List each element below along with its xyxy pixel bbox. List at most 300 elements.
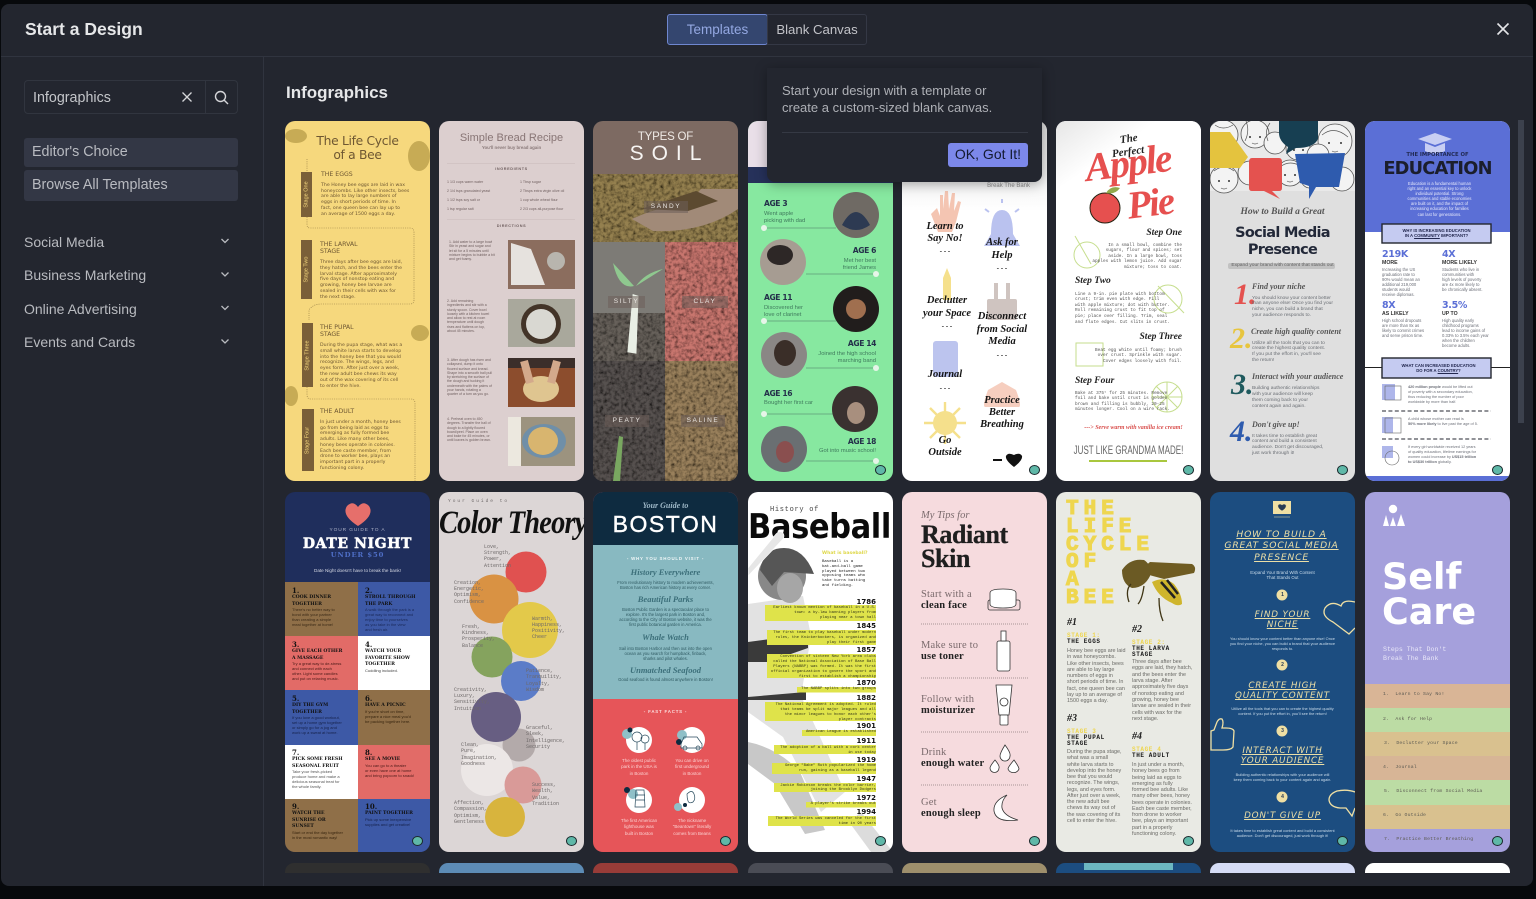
card: guide to boston: The nickname <box>678 818 706 822</box>
card: age timeline: Bought her first car <box>764 400 813 406</box>
date idea 6: be packing together here. <box>365 719 410 724</box>
card: social media presence: Find your niche <box>1252 282 1305 291</box>
card: perfect apple pie: Step Two <box>1075 276 1111 286</box>
card: color theory: Prosperity, <box>462 636 495 642</box>
card: the life cycle of a bee: cells with wax for the <box>1132 710 1182 716</box>
card: the life cycle of a bee: Honey bee eggs are laid <box>1067 648 1125 654</box>
card: simple bread recipe: board/peel. Place on oven <box>447 430 488 434</box>
card: types of soil: TYPES OF <box>638 131 693 143</box>
date idea 7 <box>292 748 343 789</box>
card: history of baseball: George "Babe" Ruth popularized the home <box>785 764 876 768</box>
card: guide to boston: Your Guide to <box>643 501 688 510</box>
card: social media presence: Interact with your audience <box>1252 372 1343 381</box>
card: simple bread recipe: and allow to rest at room <box>447 316 485 320</box>
card: history of baseball: 1901 <box>857 722 876 730</box>
card: social media presence: 2. <box>1230 322 1252 355</box>
card: life cycle of a bee: In just under a month, honey bees <box>320 420 401 425</box>
card: the life cycle of a bee: After just over a week, <box>1067 793 1120 799</box>
card: social media presence: content and build a consistent <box>1252 439 1317 444</box>
card: color theory: Intuition <box>454 706 481 712</box>
card: steps that don't break the bank: Declutter <box>927 295 967 306</box>
card: history of baseball: The NABBP splits into two groups <box>801 686 876 690</box>
card: guide to boston: comes from Beans <box>673 830 711 836</box>
card: life cycle of a bee: the next stage. <box>320 295 356 300</box>
card: the life cycle of a bee: short periods of time. In <box>1067 679 1123 685</box>
card: the life cycle of a bee: recognize. The wings, <box>1067 780 1119 786</box>
card: simple bread recipe: 4. Preheat oven to 450 <box>447 417 482 421</box>
card: simple bread recipe: and get foamy. <box>449 257 472 261</box>
card: history of baseball: 1919 <box>857 756 876 764</box>
card: social media presence: Don't give up! <box>1252 420 1300 429</box>
date idea 4: TOGETHER <box>365 662 395 667</box>
card: perfect apple pie: The <box>1119 132 1138 146</box>
card: color theory: Balance <box>462 643 483 649</box>
card: guide to boston: You can drive on <box>675 758 709 762</box>
card: life cycle of a bee: growing, honey bee larvae are <box>320 283 392 288</box>
card: the life cycle of a bee: develop into the honey <box>1067 768 1121 774</box>
card: importance of education: and serve prison time. <box>1382 333 1423 338</box>
date idea 7: SEASONAL FRUIT <box>292 764 339 769</box>
card: the life cycle of a bee: eggs are laid, they hatch, <box>1132 665 1192 671</box>
date idea 2: STROLL THROUGH <box>365 595 415 600</box>
date idea 4 <box>364 640 410 673</box>
date idea 10: Pick up some inexpensive <box>365 817 411 822</box>
card: life cycle of a bee: STAGE <box>320 331 340 338</box>
date idea 9: WATCH THE <box>292 811 324 816</box>
card: history of baseball: the minor leagues to honor each other's <box>785 713 876 717</box>
tab: blank canvas <box>767 14 867 45</box>
card: simple bread recipe: sturdy spoon. Cover bowl <box>447 308 486 312</box>
card: life cycle of a bee: fact, one queen bee can lay up to <box>321 206 400 211</box>
card: history of baseball: opposing teams who <box>822 574 865 578</box>
button: browse all templates <box>24 170 238 201</box>
card: history of baseball: and fielding. <box>822 584 853 588</box>
card: importance of education: If every girl worldwide received 12 years <box>1408 445 1476 449</box>
card: the life cycle of a bee: THE PUPAL <box>1067 734 1105 741</box>
card: social media presence: How to Build a Great <box>1241 207 1324 217</box>
tooltip: onboarding callout: create a custom-sized blank canvas. <box>782 100 992 115</box>
card: life cycle of a bee: larval stage. After approximately <box>320 272 397 277</box>
card: importance of education: increasing education for families <box>1410 206 1469 211</box>
card: the life cycle of a bee: chews its way out of <box>1067 805 1115 811</box>
card: history of baseball: called the National Association of Base Ball <box>773 660 876 664</box>
card: simple bread recipe: temperature until dough <box>447 320 484 324</box>
card: guide to boston: BOSTON <box>613 510 718 536</box>
card: importance of education: High school dropouts <box>1382 318 1421 323</box>
card: life cycle of a bee: drone to worker bee, plays an <box>320 454 390 459</box>
card: importance of education: 3.5% <box>1442 300 1467 311</box>
label: silty <box>608 296 645 308</box>
card: steps that don't break the bank: - - - <box>940 247 950 255</box>
card: importance of education: 50% more likely to live past the age of 5. <box>1408 422 1478 426</box>
card: history of baseball: Convention of sixteen New York area clubs <box>780 655 876 659</box>
button: ok got it <box>948 143 1028 167</box>
date idea 8: and bring popcorn to snack! <box>365 773 414 778</box>
icon: bat over title <box>748 532 784 575</box>
card: the life cycle of a bee: #2 <box>1132 624 1142 635</box>
date idea 6: 6. <box>365 694 372 703</box>
date idea 2: great way to reconnect and <box>365 612 413 617</box>
card: color theory: Sleek, <box>526 731 544 737</box>
card: history of baseball: A player's strike breaks out <box>811 802 876 806</box>
card: life cycle of a bee: adults. Like many other bees, <box>320 437 390 442</box>
button: editor's choice: Editor's Choice <box>32 144 128 160</box>
card: history of baseball: rules, the Knickerbockers, is organized and <box>776 636 876 640</box>
label: saline: SALINE <box>687 417 719 424</box>
card: importance of education: become adults. <box>1442 343 1470 348</box>
date idea 1: 1. <box>292 586 299 595</box>
date idea 7: 7. <box>292 748 299 757</box>
card: the life cycle of a bee: 1500 eggs a day. <box>1067 698 1108 704</box>
stage label two: Stage Two <box>303 257 309 282</box>
card: history of baseball: play their first game <box>827 641 876 645</box>
card: life cycle of a bee: THE PUPAL <box>320 324 354 331</box>
date idea 3: and put on relaxing music. <box>292 676 339 681</box>
card: radiant skin: Get <box>921 797 937 808</box>
date idea 4: WATCH YOUR <box>365 649 401 654</box>
card: social media presence: just work through it! <box>1252 451 1294 456</box>
card: perfect apple pie: JUST LIKE GRANDMA MADE! <box>1074 444 1183 457</box>
card: guide to boston: in Boston <box>630 770 648 776</box>
card: importance of education: to US$30 trillion globally. <box>1408 460 1452 464</box>
card: importance of education: DO FOR A COUNTRY? <box>1416 368 1461 373</box>
card: social media presence: You should know your content better <box>1252 296 1331 300</box>
icon: close <box>1497 22 1509 36</box>
card: color theory: Value, <box>532 795 550 801</box>
template badge <box>875 836 886 846</box>
date idea 1: bond with your partner <box>292 612 332 617</box>
card: the life cycle of a bee: THE EGGS <box>1067 638 1101 645</box>
row 3 peek: next templates <box>285 863 1510 873</box>
card: importance of education: MORE LIKELY <box>1442 260 1477 266</box>
card: simple bread recipe: DIRECTIONS <box>497 224 526 228</box>
card: life cycle of a bee: THE LARVAL <box>320 241 358 248</box>
menu: events and cards: Events and Cards <box>24 334 135 350</box>
card: radiant skin: My Tips for <box>921 510 969 521</box>
card: color theory: Kindness, <box>462 630 489 636</box>
card: importance of education: communities with <box>1442 272 1474 277</box>
card: simple bread recipe: let sit for a 5 minutes until <box>449 249 489 253</box>
card: perfect apple pie: aside. In a large bowl, toss <box>1108 254 1182 259</box>
card: the life cycle of a bee: STAGE 2: <box>1132 639 1166 646</box>
card: life cycle of a bee: of a Bee <box>333 148 382 162</box>
card: importance of education: AS LIKELY <box>1382 311 1409 317</box>
template badge <box>1029 836 1040 846</box>
card: steps that don't break the bank: - - - <box>942 322 952 330</box>
card: simple bread recipe: Simple Bread Recipe <box>460 132 563 144</box>
card: importance of education: receive diplomas. <box>1382 292 1415 297</box>
card: history of baseball: The World Series was canceled for the first <box>776 817 876 821</box>
card: life cycle of a bee: honey bees operate in colonies. <box>320 443 395 448</box>
card: simple bread recipe: mixture begins to bubble a bit <box>449 253 495 257</box>
card: color theory: Goodness <box>461 761 485 767</box>
card: how to build a social media presence: responds to. <box>1272 646 1293 650</box>
card: age timeline: marching band <box>838 358 876 364</box>
card: steps that don't break the bank: Go <box>939 435 951 446</box>
card: importance of education: 8X <box>1382 300 1395 311</box>
label: saline <box>681 415 725 427</box>
card: the life cycle of a bee: and the bees enter the <box>1132 672 1186 678</box>
card: importance of education: additional 219,000 <box>1382 282 1416 287</box>
date idea 3: Try a great way to de-stress <box>292 661 341 666</box>
card: color theory: Gentleness <box>454 819 484 825</box>
card: the life cycle of a bee: In just under a month, <box>1132 762 1184 768</box>
card: history of baseball: time in 90 years <box>839 822 876 826</box>
card: radiant skin: Drink <box>921 747 946 758</box>
date idea 8: 8. <box>365 748 372 757</box>
card: importance of education: when the children <box>1442 338 1475 343</box>
card: types of soil <box>593 121 738 481</box>
card: history of baseball: American League is established <box>806 730 876 734</box>
card: life cycle of a bee: THE ADULT <box>320 408 354 415</box>
card: life cycle of a bee: into the honey bee that you would <box>320 355 401 360</box>
card: importance of education: MORE <box>1382 260 1398 266</box>
card: steps that don't break the bank <box>902 121 1047 481</box>
card: perfect apple pie: brown and filling is bubbly, 20-25 <box>1075 402 1165 407</box>
date idea 5: 5. <box>292 694 299 703</box>
card: how to build a social media presence: content. If you put the effort in, you'll see the return! <box>1238 710 1327 716</box>
date idea 5: DIY THE GYM <box>292 703 328 708</box>
card: the life cycle of a bee: larvae are sealed in their <box>1132 703 1191 709</box>
card: steps that don't break the bank: Breathing <box>980 419 1024 430</box>
card: how to build a social media presence: Expand Your Brand With Content <box>1250 570 1315 574</box>
card: steps that don't break the bank: Practice <box>984 395 1020 406</box>
card: social media presence: 3. <box>1231 368 1254 401</box>
card: the life cycle of a bee <box>1056 492 1201 852</box>
card: the life cycle of a bee: A <box>1066 569 1084 592</box>
card: steps that don't break the bank: Ask for <box>986 237 1018 248</box>
card: age timeline: Met her best <box>844 258 876 264</box>
card: the life cycle of a bee: from drone to worker <box>1132 812 1182 818</box>
card: importance of education: likely to commit crimes <box>1382 328 1424 333</box>
card: age timeline: Joined the high school <box>818 351 876 357</box>
card: guide to boston <box>593 492 738 852</box>
card: importance of education: of poverty with a secondary education, <box>1408 390 1473 394</box>
card: life cycle of a bee: eggs in short periods of time. In <box>321 200 396 205</box>
card: guide to boston: Unmatched Seafood <box>630 665 701 675</box>
date idea 3: and connect with each <box>292 666 332 671</box>
card: perfect apple pie: Pie <box>1125 179 1175 228</box>
card: importance of education: students would <box>1382 287 1410 292</box>
card: perfect apple pie: Line a 9-in. pie plate with bottom <box>1075 292 1165 296</box>
card: importance of education: 4X <box>1442 249 1455 260</box>
stage label one: Stage One <box>303 181 309 208</box>
card: how to build a social media presence: GREAT SOCIAL MEDIA <box>1224 540 1339 551</box>
card: self care: 3. Declutter your Space <box>1384 740 1458 746</box>
card: how to build a social media presence: 2 <box>1281 662 1284 668</box>
card: color theory: Cheer <box>532 634 547 640</box>
card: color theory: Clean, <box>461 742 479 748</box>
label: sandy <box>644 201 688 213</box>
card: history of baseball: Baseball is a <box>822 560 853 564</box>
card: guide to boston: Boston has rich American history at every corner. <box>620 585 711 590</box>
card: simple bread recipe: You'll never buy bread again <box>482 145 541 150</box>
card: importance of education: thus reducing the number of poor <box>1408 395 1464 399</box>
card: how to build a social media presence: keep them coming back to your content again and again. <box>1234 776 1331 782</box>
date idea 6: prepare a nice meal you'd <box>365 714 411 719</box>
card: the life cycle of a bee: STAGE 3 <box>1067 728 1096 735</box>
date idea 8: SEE A MOVIE <box>365 757 400 762</box>
card: how to build a social media presence: Utilize all the tools that you can to create the highest quality <box>1231 706 1334 710</box>
card: importance of education <box>1365 121 1510 481</box>
card: history of baseball: official organization to govern the sport and <box>771 670 876 674</box>
card: simple bread recipe: until loaves is golden brown. <box>447 438 491 442</box>
card: perfect apple pie: crust; trim even with edge. Fill <box>1075 297 1159 302</box>
card: steps that don't break the bank: Better <box>989 407 1015 418</box>
card: simple bread recipe: loosely with a kitchen towel <box>447 312 489 316</box>
card: life cycle of a bee: small white larva starts to develop <box>320 349 401 354</box>
card: color theory: Creation, <box>454 580 481 586</box>
template badge <box>1029 465 1040 475</box>
card: color theory: Strength, <box>484 550 511 556</box>
card: history of baseball: 1947 <box>857 775 876 783</box>
card: color theory: Patience, <box>526 668 553 674</box>
card: the life cycle of a bee: emerging as fully <box>1132 781 1173 787</box>
card: age timeline: AGE 11 <box>764 293 792 302</box>
card: perfect apple pie: Step Four <box>1075 376 1114 386</box>
card: social media presence: Utilize all the tools that you can to <box>1252 340 1325 346</box>
card: the life cycle of a bee: functioning colony. <box>1132 831 1176 837</box>
card: history of baseball: town: a by-law banning players from <box>794 611 876 615</box>
card: age timeline: picking with dad <box>764 218 805 224</box>
card: importance of education: Students who live in <box>1442 267 1479 272</box>
card: history of baseball: 1882 <box>857 694 876 702</box>
card: radiant skin <box>902 492 1047 852</box>
card: how to build a social media presence: FIND YOUR <box>1255 610 1310 620</box>
card: perfect apple pie: mixture; toss to coat. <box>1124 265 1182 270</box>
card: simple bread recipe: 2 1/4 tsps granulated yeast <box>447 189 490 193</box>
card: social media presence: Presence <box>1248 242 1317 258</box>
card: color theory: Attention <box>484 563 511 569</box>
card: how to build a social media presence: You should know your content better than anyone else! Once <box>1230 636 1335 640</box>
card: the life cycle of a bee: Three days after bee <box>1132 659 1182 665</box>
card: color theory: Loyalty, <box>526 681 550 687</box>
card: how to build a social media presence: YOUR AUDIENCE <box>1241 756 1324 766</box>
card: perfect apple pie: over crust. Sprinkle with sugar. <box>1098 353 1182 358</box>
template badge <box>1183 836 1194 846</box>
card: simple bread recipe: 1 cup whole wheat flour <box>520 198 558 202</box>
card: date night: Date Night doesn't have to break the bank! <box>314 568 401 572</box>
date idea 1: TOGETHER <box>292 602 322 607</box>
date idea 4: FAVORITE SHOW <box>365 656 410 661</box>
card: steps that don't break the bank: Help <box>992 250 1012 260</box>
card: the life cycle of a bee: #4 <box>1132 731 1142 742</box>
card: radiant skin: clean face <box>921 600 967 611</box>
card: self care: 6. Go Outside <box>1383 813 1426 818</box>
card: how to build a social media presence: INTERACT WITH <box>1242 746 1323 756</box>
card: radiant skin: Follow with <box>921 694 974 705</box>
date idea 6 <box>365 694 411 724</box>
card: life cycle of a bee: THE EGGS <box>321 171 353 178</box>
card: color theory: Sensitivity, <box>454 699 490 705</box>
card: life cycle of a bee: eyes form. After just over a week, <box>320 366 399 371</box>
card: the life cycle of a bee: next stage. <box>1132 716 1158 722</box>
card: life cycle of a bee: honeycombs. Like other insects, bees <box>321 189 409 194</box>
card: how to build a social media presence: 3 <box>1281 728 1284 734</box>
card: life cycle of a bee: emerging as fully formed bee <box>320 431 389 436</box>
card: color theory: Fresh, <box>462 624 480 630</box>
card: guide to boston: sharks and pilot whales. <box>643 656 688 661</box>
card: radiant skin: use toner <box>921 651 964 662</box>
card: the life cycle of a bee: #3 <box>1067 713 1077 724</box>
card: importance of education: are more than 8x as <box>1382 323 1419 328</box>
card: life cycle of a bee: go from being laid as eggs to <box>320 426 389 431</box>
card: simple bread recipe: the dough and tucking it <box>447 379 484 383</box>
card: social media presence: create the highest quality content. <box>1252 346 1325 351</box>
card: guide to boston: "Beantown" literally <box>673 824 711 829</box>
card: importance of education: Increasing the US <box>1382 267 1415 272</box>
card: radiant skin: enough water <box>921 758 984 769</box>
card: how to build a social media presence: audience. Don't get discouraged, just work through it! <box>1237 832 1328 838</box>
card: self care: 4. Journal <box>1383 765 1417 770</box>
label: peaty: PEATY <box>613 417 641 424</box>
date idea 10: supplies and get creative! <box>365 822 410 827</box>
label: peaty <box>605 415 649 427</box>
card: life cycle of a bee: Each bee caste member, from <box>320 449 391 454</box>
card: importance of education: are built on it, and the impact of <box>1411 201 1468 206</box>
card: simple bread recipe: collapsed, dump it onto <box>447 362 483 366</box>
card: history of baseball: 1911 <box>857 737 876 745</box>
template badge <box>1337 465 1348 475</box>
card: history of baseball: The National Agreement is adopted. It ruled <box>776 703 876 707</box>
card: perfect apple pie: and flute edges. Cut slits in crust. <box>1075 320 1170 325</box>
card: social media presence: It takes time to establish great <box>1252 434 1317 438</box>
date idea 7: delicious seasonal treat for <box>292 779 340 784</box>
card: the life cycle of a bee: the new adult bee <box>1067 799 1110 805</box>
date idea 10 <box>365 802 413 827</box>
card: how to build a social media presence: It takes time to establish great content and build a consistent <box>1230 828 1335 832</box>
card: perfect apple pie: Beat egg white until foamy; brush <box>1095 348 1182 352</box>
card: self care <box>1365 492 1510 852</box>
card: color theory: Wealth, <box>532 788 553 794</box>
card: history of baseball: What is baseball? <box>822 551 868 556</box>
card: age timeline: AGE 14 <box>848 339 876 348</box>
card: importance of education: graduation rate to <box>1382 272 1415 277</box>
card: age timeline: love of clarinet <box>764 312 801 318</box>
card: perfect apple pie: Step Three <box>1140 332 1182 342</box>
tooltip: onboarding callout <box>767 68 1042 182</box>
card: history of baseball: player contracts <box>839 718 876 722</box>
card: self care: Steps That Don't <box>1383 646 1446 653</box>
card: date night: UNDER $50 <box>331 551 384 559</box>
card: simple bread recipe: 1 1/3 cups warm water <box>447 180 483 184</box>
template badge <box>1337 836 1348 846</box>
template badge <box>1492 836 1503 846</box>
card: how to build a social media presence: That Stands Out <box>1266 575 1298 580</box>
card: the life cycle of a bee: are able to lay large <box>1067 667 1114 673</box>
card: guide to boston: first underground <box>675 764 709 769</box>
card: social media presence: with your audience will keep <box>1252 392 1313 397</box>
card: life cycle of a bee: are able to lay large numbers of <box>321 194 396 199</box>
card: history of baseball: played between two <box>822 570 865 574</box>
card: life cycle of a bee: recognize. The wings, legs, and <box>320 360 394 365</box>
card: color theory: Success, <box>532 782 556 788</box>
card: importance of education: worldwide by more than half. <box>1408 400 1456 404</box>
card: simple bread recipe: ingredients and stir with a <box>447 303 487 307</box>
card: the life cycle of a bee: #1 <box>1067 617 1077 628</box>
card: color theory: Luxury, <box>454 693 475 699</box>
card: social media presence: 1. <box>1234 278 1256 311</box>
label: clay <box>682 296 728 308</box>
date idea 7: the whole family. <box>292 784 322 789</box>
scrollbar <box>1518 120 1524 423</box>
card: steps that don't break the bank: from Social <box>977 324 1027 334</box>
date idea 1 <box>292 586 335 627</box>
card: guide to boston: Good seafood is found almost anywhere in Boston! <box>618 676 713 682</box>
card: perfect apple pie: pie; place over filling. Trim, seal <box>1075 314 1167 319</box>
card: color theory: Color Theory <box>439 505 584 541</box>
date idea 5: set up a home gym together <box>292 720 342 725</box>
